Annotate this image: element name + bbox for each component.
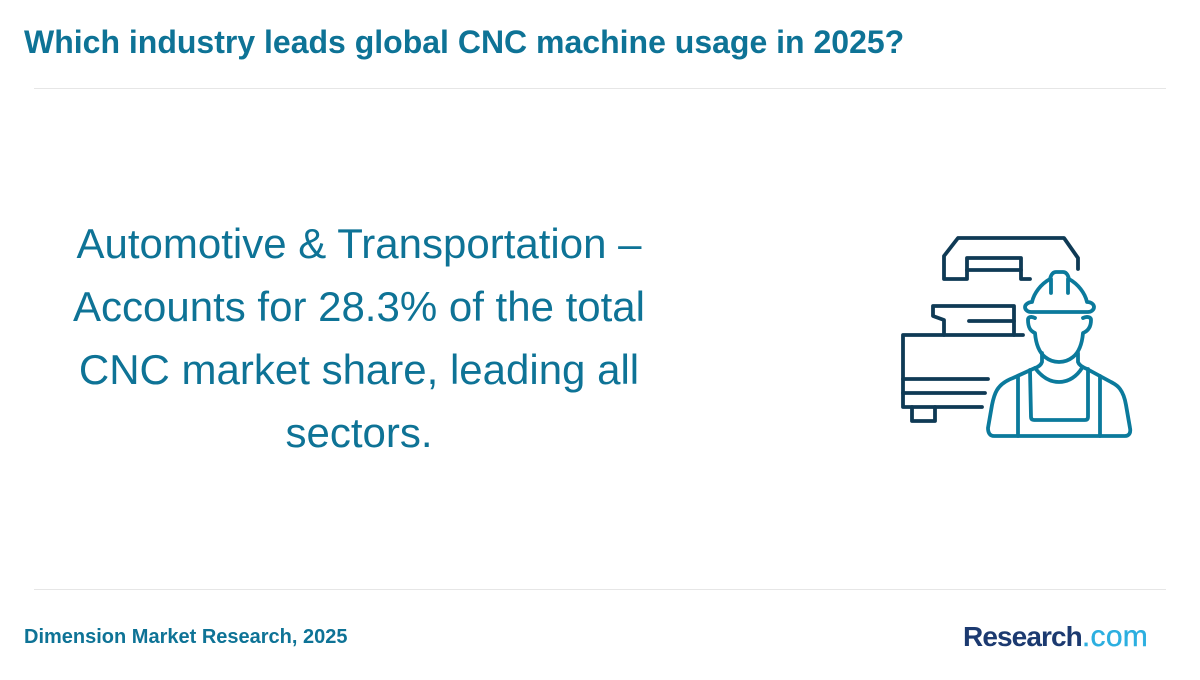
main statement text: Accounts for 28.3% of the total xyxy=(73,282,645,330)
logo: Research.com xyxy=(963,620,1148,653)
icon: worker xyxy=(988,272,1130,436)
source: Dimension Market Research, 2025 xyxy=(24,626,348,648)
icon: CNC machine xyxy=(903,238,1078,421)
main statement text: sectors. xyxy=(285,408,433,456)
main statement text xyxy=(73,220,645,456)
main statement text: Automotive & Transportation – xyxy=(76,220,641,266)
icon: CNC machine and worker xyxy=(901,236,1132,438)
title: Which industry leads global CNC machine usage in 2025? xyxy=(24,24,904,60)
main statement text: CNC market share, leading all xyxy=(79,346,639,392)
